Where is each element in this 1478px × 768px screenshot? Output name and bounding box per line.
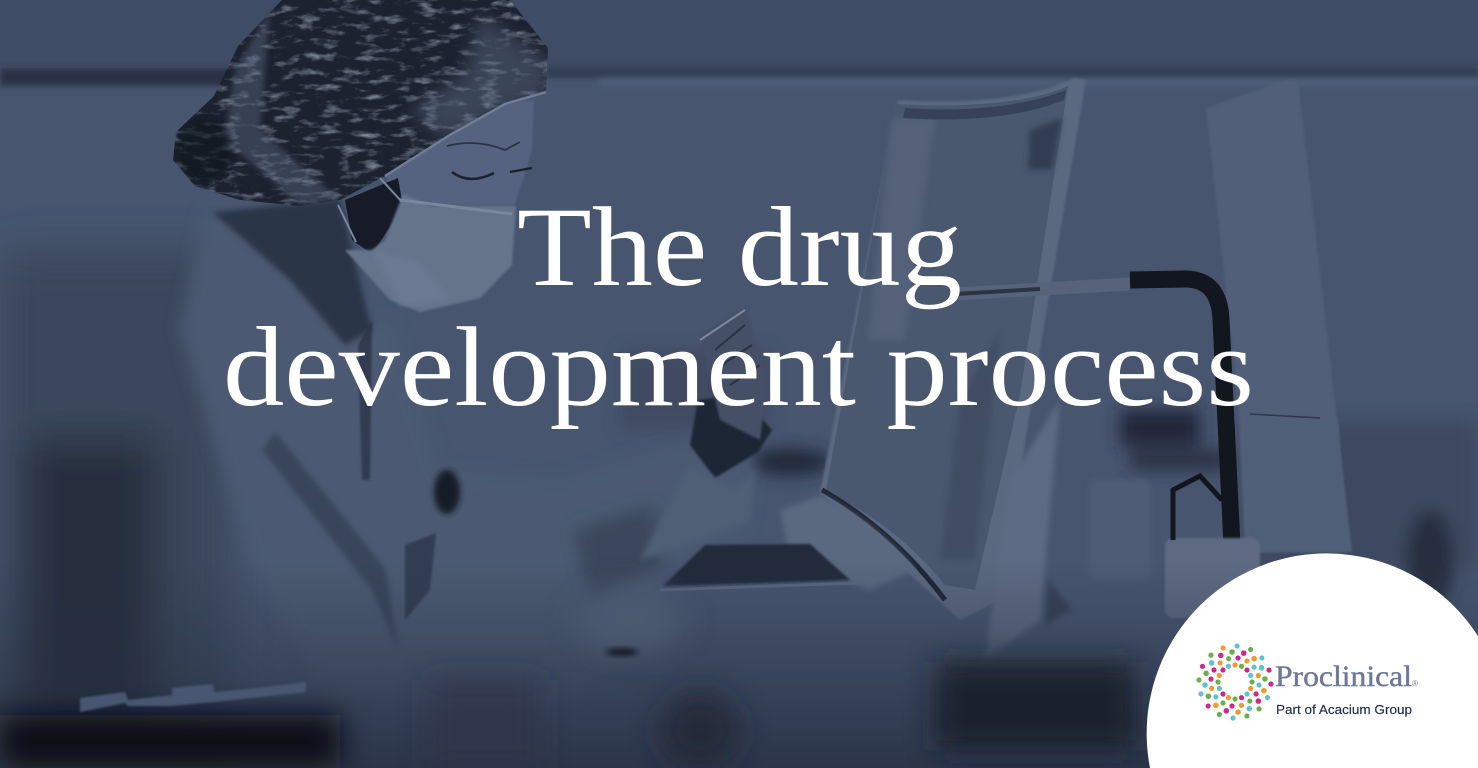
white logo circle [1147,553,1478,768]
title line 1: The drug [517,185,962,310]
icon: dotted circular burst [1196,643,1274,721]
bench items: jar and beaker [985,400,1260,660]
blurred bench objects [620,350,1478,610]
scientist face [385,100,534,205]
blurred shelf strip [80,682,306,712]
logo: Proclinical [1196,643,1418,721]
title [223,185,1254,430]
hair net cap [173,0,548,206]
gloved hand holding vial [640,308,772,560]
registered mark: ® [1412,679,1418,688]
lab coat [180,205,755,700]
scientist neck [212,200,372,345]
left monitor [780,78,1086,620]
desk lamp arm [955,279,1232,545]
logo tagline: Part of Acacium Group [1276,702,1412,717]
blurred left foreground [0,250,230,768]
surgical mask [338,178,516,312]
eyes and brow [447,142,532,179]
upper cabinets [0,0,1478,66]
title line 2: development process [223,305,1254,430]
logo wordmark: Proclinical [1275,660,1412,693]
laptop tray on bench [660,544,858,590]
dark spot under hand [606,648,638,656]
dark hair under cap [345,178,403,254]
right monitor [1206,80,1352,552]
blurred bottom foreground [0,560,1478,768]
shelf band [0,66,1478,86]
